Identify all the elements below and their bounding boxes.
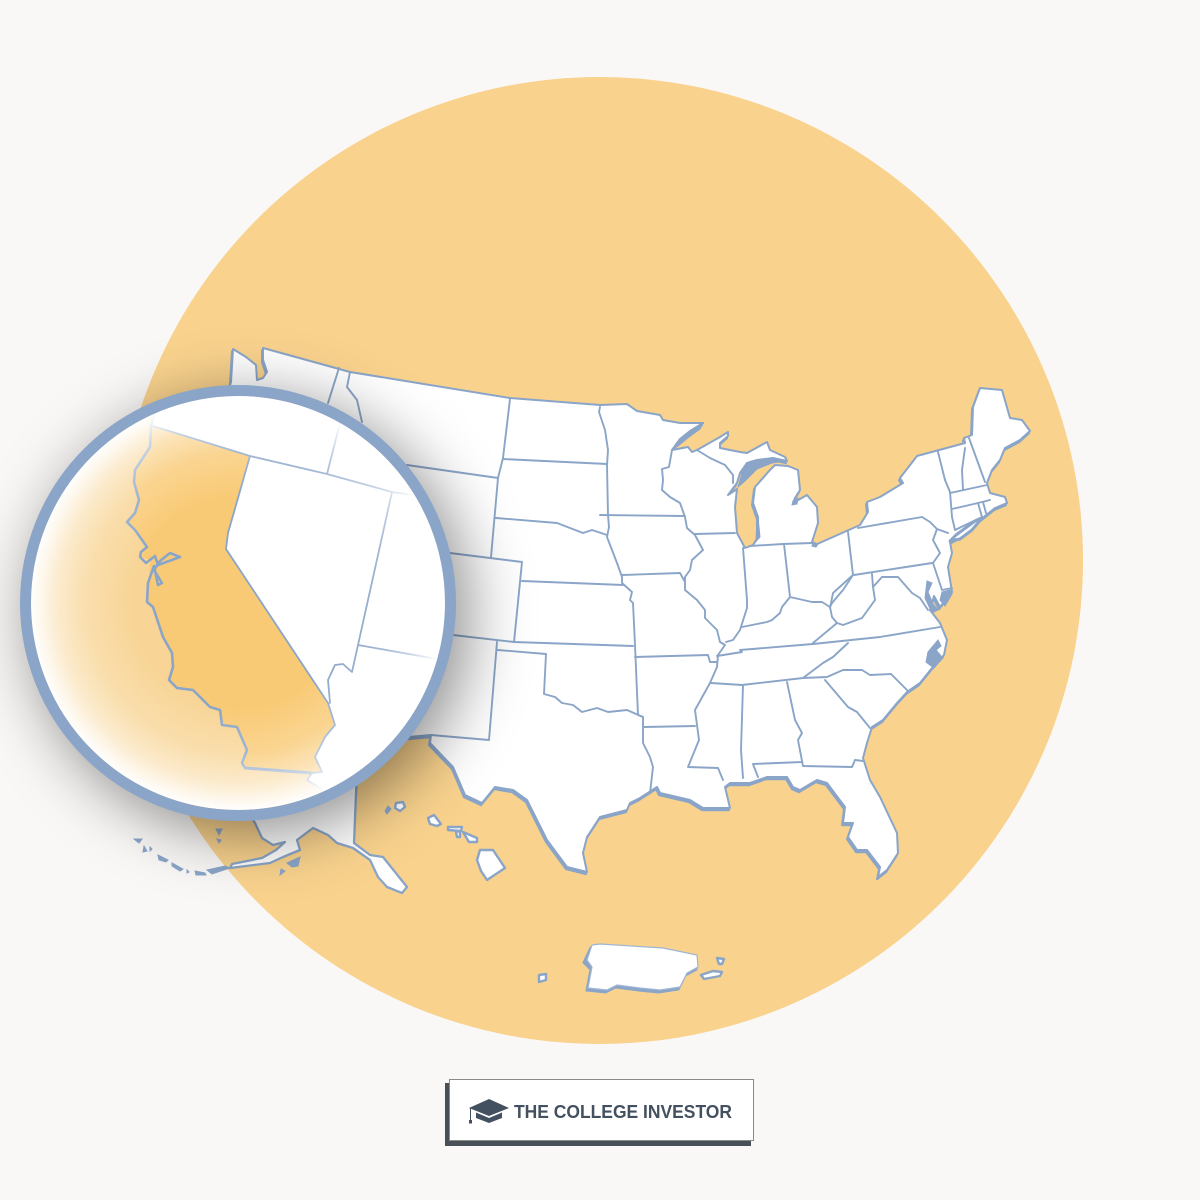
Hawaii big island bbox=[477, 850, 505, 880]
Hawaii bbox=[385, 802, 505, 880]
logo badge bbox=[445, 1080, 754, 1146]
logo shadow bbox=[445, 1083, 751, 1146]
lens edge fade bbox=[30, 395, 446, 811]
map: United States bbox=[134, 348, 1030, 992]
Alaska mainland bbox=[230, 770, 407, 893]
Puerto Rico small islands bbox=[539, 958, 724, 982]
Pamlico Sound bbox=[926, 640, 942, 668]
state borders: mid-Atlantic and New England bbox=[830, 438, 990, 625]
Oregon Idaho border bbox=[327, 423, 340, 474]
state borders: Great Lakes and Ohio valley bbox=[695, 450, 853, 643]
California bbox=[127, 426, 335, 773]
magnifier drop shadow bbox=[32, 398, 468, 834]
lens white land bbox=[136, 396, 445, 810]
icon: graduation cap bbox=[469, 1099, 509, 1124]
contiguous states coast shadow bbox=[149, 350, 1029, 879]
Hawaii smaller islands bbox=[395, 802, 477, 842]
Chesapeake and Delaware bays bbox=[925, 581, 952, 613]
Oregon and Nevada northern border bbox=[153, 426, 413, 495]
Puerto Rico main island bbox=[587, 944, 698, 990]
state borders: Mississippi valley bbox=[599, 407, 725, 780]
logo box bbox=[450, 1080, 754, 1140]
California southern border bbox=[245, 768, 312, 773]
California coastline bbox=[127, 400, 247, 768]
background circle bbox=[116, 77, 1083, 1044]
contiguous states land bbox=[150, 348, 1030, 877]
state borders: south-east bbox=[711, 627, 940, 778]
Hawaii small islet bbox=[385, 806, 391, 814]
Great Lakes shoreline thickening bbox=[672, 423, 818, 547]
Alaska islands bbox=[134, 829, 300, 875]
Nevada Utah Arizona borders bbox=[328, 492, 437, 703]
Long Island bbox=[950, 518, 982, 541]
Puerto Rico bbox=[539, 944, 724, 992]
logo wordmark: THE COLLEGE INVESTOR bbox=[514, 1102, 732, 1122]
lens ocean bbox=[31, 414, 323, 810]
California Nevada Arizona border bbox=[226, 456, 335, 790]
Alaska bbox=[134, 770, 407, 893]
lens ring bbox=[26, 390, 450, 816]
Puerto Rico shadow bbox=[584, 946, 696, 992]
lens content bbox=[31, 396, 445, 810]
magnifying lens: California bbox=[0, 380, 456, 840]
state borders: north-west and plains bbox=[328, 368, 653, 793]
